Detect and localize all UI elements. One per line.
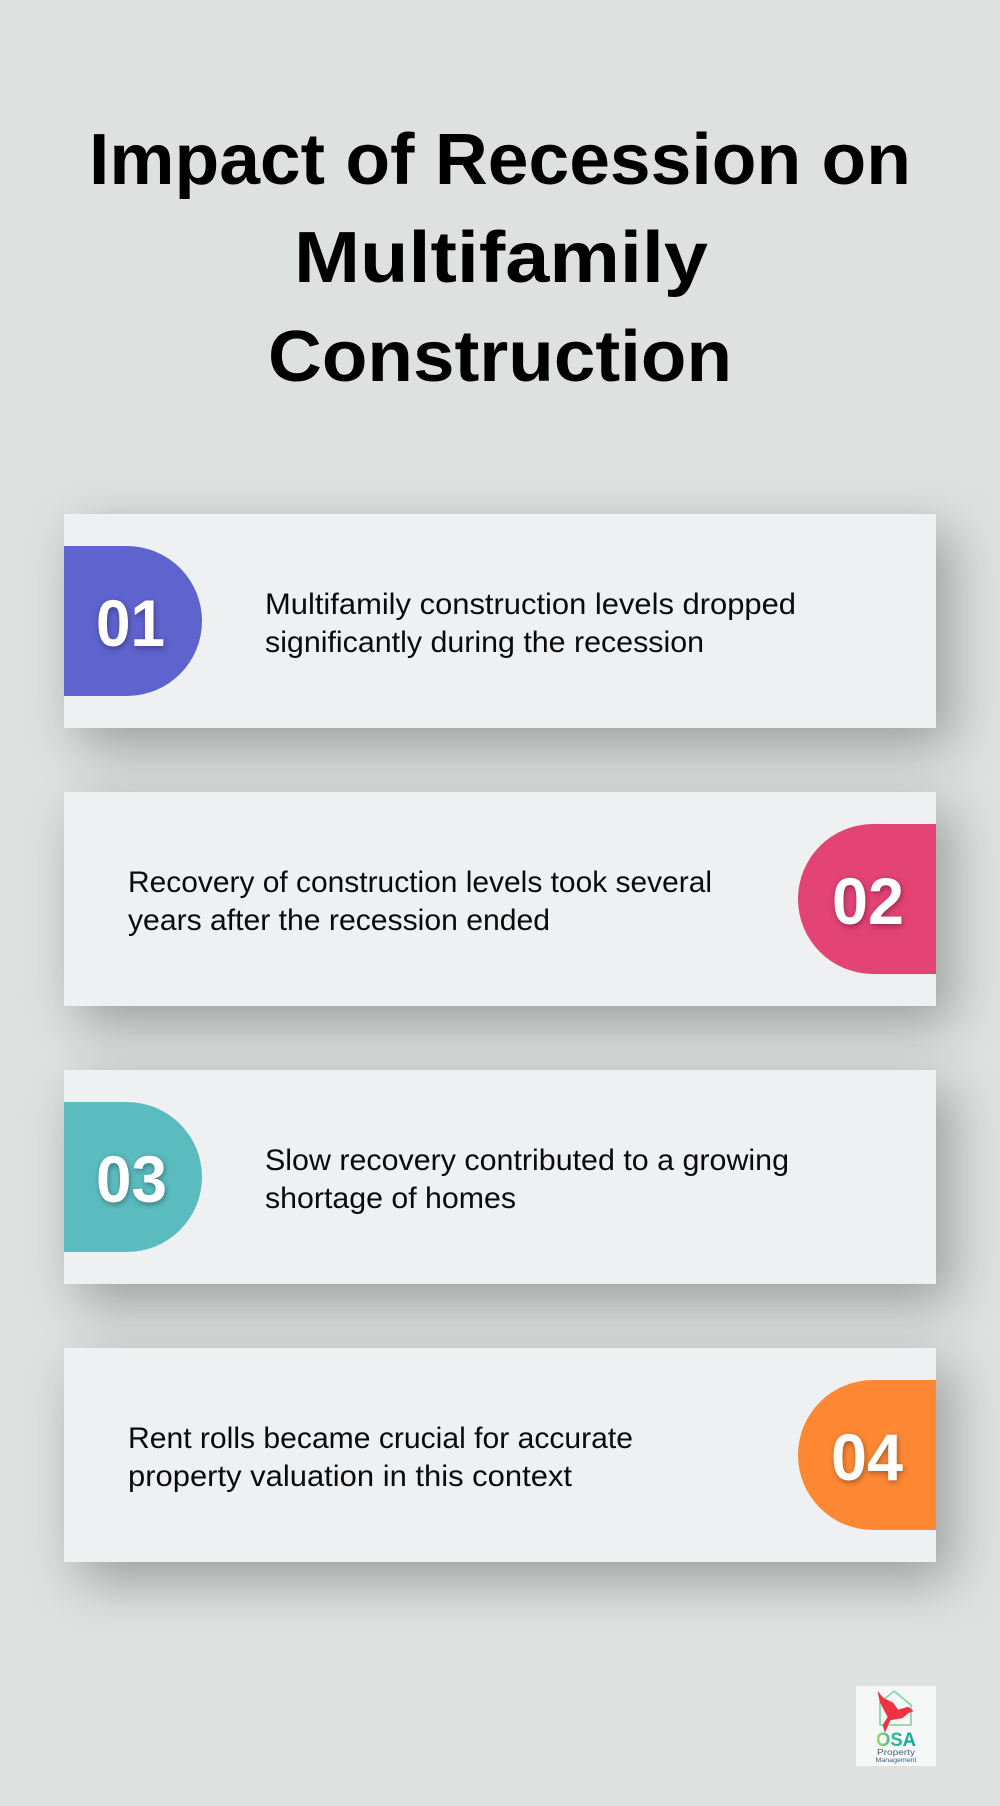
panel: step 03 xyxy=(64,1070,936,1284)
text: step 03 xyxy=(265,1144,789,1215)
text: step 02 xyxy=(128,866,712,937)
logo: OSA Property Management: OSA xyxy=(876,1730,916,1751)
title xyxy=(89,120,911,397)
title: Multifamily xyxy=(294,218,708,298)
text: step 04: property valuation in this context xyxy=(128,1460,573,1493)
number badge 02 xyxy=(798,824,936,974)
logo: OSA Property Management xyxy=(856,1686,936,1766)
text: step 02: Recovery of construction levels took several xyxy=(128,866,712,899)
title: Construction xyxy=(268,317,732,397)
text: step 01 xyxy=(265,588,796,659)
panel: step 01 xyxy=(64,514,936,728)
text: step 03: shortage of homes xyxy=(265,1182,516,1215)
logo: OSA Property Management: Property xyxy=(877,1747,916,1757)
text: step 04 xyxy=(128,1422,633,1493)
number badge 03: 03 xyxy=(96,1142,167,1216)
panel: step 04 xyxy=(64,1348,936,1562)
number badge 04 xyxy=(798,1380,936,1530)
number badge 02: 02 xyxy=(832,864,904,938)
logo: OSA Property Management: Management xyxy=(876,1758,917,1764)
text: step 01: significantly during the recession xyxy=(265,626,704,659)
number badge 03 xyxy=(64,1102,202,1252)
text: step 01: Multifamily construction levels dropped xyxy=(265,588,796,621)
panel: step 02 xyxy=(64,792,936,1006)
text: step 02: years after the recession ended xyxy=(128,904,550,937)
number badge 04: 04 xyxy=(831,1420,903,1494)
number badge 01: 01 xyxy=(96,586,165,660)
title: Impact of Recession on xyxy=(89,120,911,200)
text: step 03: Slow recovery contributed to a growing xyxy=(265,1144,789,1177)
text: step 04: Rent rolls became crucial for accurate xyxy=(128,1422,633,1455)
number badge 01 xyxy=(64,546,202,696)
